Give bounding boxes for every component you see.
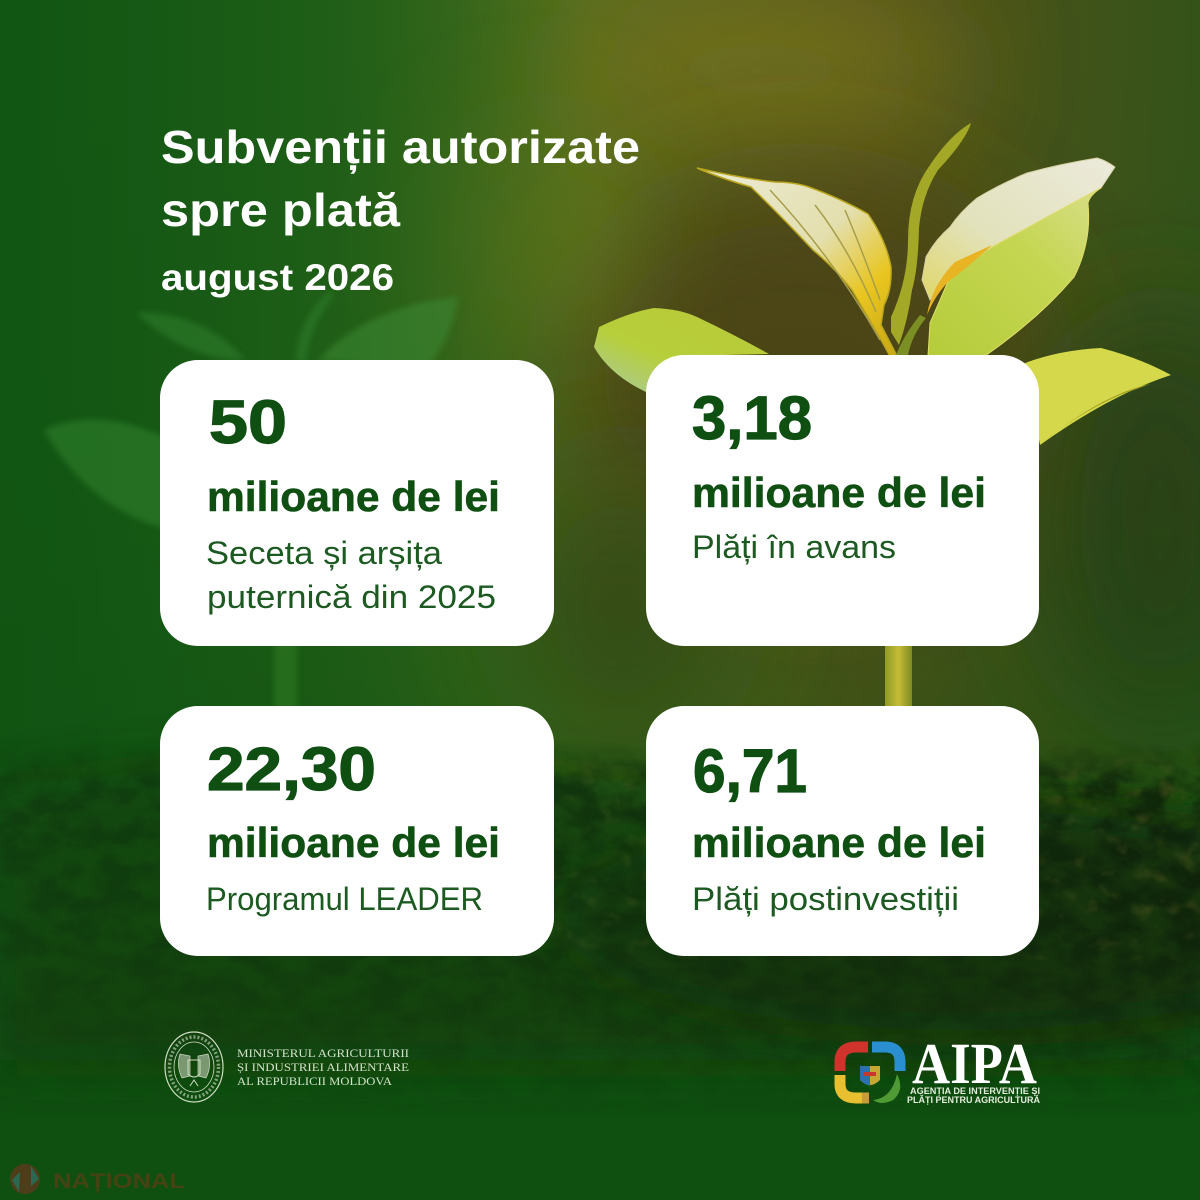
card: 50 milioane: Seceta și arșița — [206, 535, 442, 571]
title: spre plată — [161, 184, 400, 236]
faded background plant — [44, 290, 458, 710]
card: 6,71 milioane: 6,71 — [693, 737, 807, 805]
card: 6,71 milioane — [646, 706, 1039, 956]
logo: ministry: AL REPUBLICII MOLDOVA — [237, 1076, 393, 1088]
icon: state seal — [165, 1032, 223, 1102]
stem — [885, 640, 912, 706]
lower left leaf — [594, 308, 769, 392]
icon: AIPA emblem — [840, 1047, 900, 1103]
upper left leaf — [697, 168, 897, 356]
card: 3,18 milioane — [646, 355, 1039, 646]
subtitle: date: august 2026 — [161, 257, 394, 298]
card: 22,30 milioane: Programul LEADER — [206, 881, 483, 917]
logo: ministry: ȘI INDUSTRIEI ALIMENTARE — [237, 1062, 409, 1074]
soil ground — [0, 745, 1200, 1090]
logo: ministry — [165, 1032, 409, 1102]
card: 22,30 milioane: 22,30 — [207, 735, 376, 803]
card: 3,18 milioane: milioane de lei — [692, 469, 986, 516]
watermark: National — [10, 1164, 185, 1194]
AIPA wordmark: AIPA — [912, 1031, 1037, 1096]
card: 50 milioane: milioane de lei — [207, 473, 500, 520]
central shoot — [891, 123, 971, 345]
watermark: National: NAȚIONAL — [53, 1170, 185, 1193]
card: 50 milioane: puternică din 2025 — [207, 579, 496, 615]
card: 50 milioane — [160, 360, 554, 646]
title: Subvenții autorizate — [161, 121, 640, 174]
card: 3,18 milioane: 3,18 — [692, 384, 812, 452]
title — [161, 121, 640, 298]
card: 6,71 milioane: milioane de lei — [692, 819, 986, 866]
main seedling — [594, 123, 1171, 706]
leaf veins — [770, 190, 880, 340]
logo: AIPA: PLĂȚI PENTRU AGRICULTURĂ — [907, 1095, 1040, 1106]
green leaf — [873, 1074, 900, 1103]
center coat of arms — [860, 1066, 880, 1085]
card: 6,71 milioane: Plăți postinvestiții — [692, 881, 959, 917]
orange leaf fold — [927, 245, 992, 315]
card: 22,30 milioane: milioane de lei — [207, 819, 500, 866]
card: 3,18 milioane: Plăți în avans — [692, 529, 896, 565]
card: 22,30 milioane — [160, 706, 554, 956]
lower right leaf — [1025, 348, 1171, 445]
logo: AIPA: AGENȚIA DE INTERVENȚIE ȘI — [910, 1086, 1040, 1097]
ministry name: MINISTERUL AGRICULTURII — [237, 1048, 409, 1060]
upper right leaf — [922, 158, 1115, 300]
card: 50 milioane: 50 — [209, 388, 287, 456]
logo: AIPA — [840, 1031, 1040, 1106]
